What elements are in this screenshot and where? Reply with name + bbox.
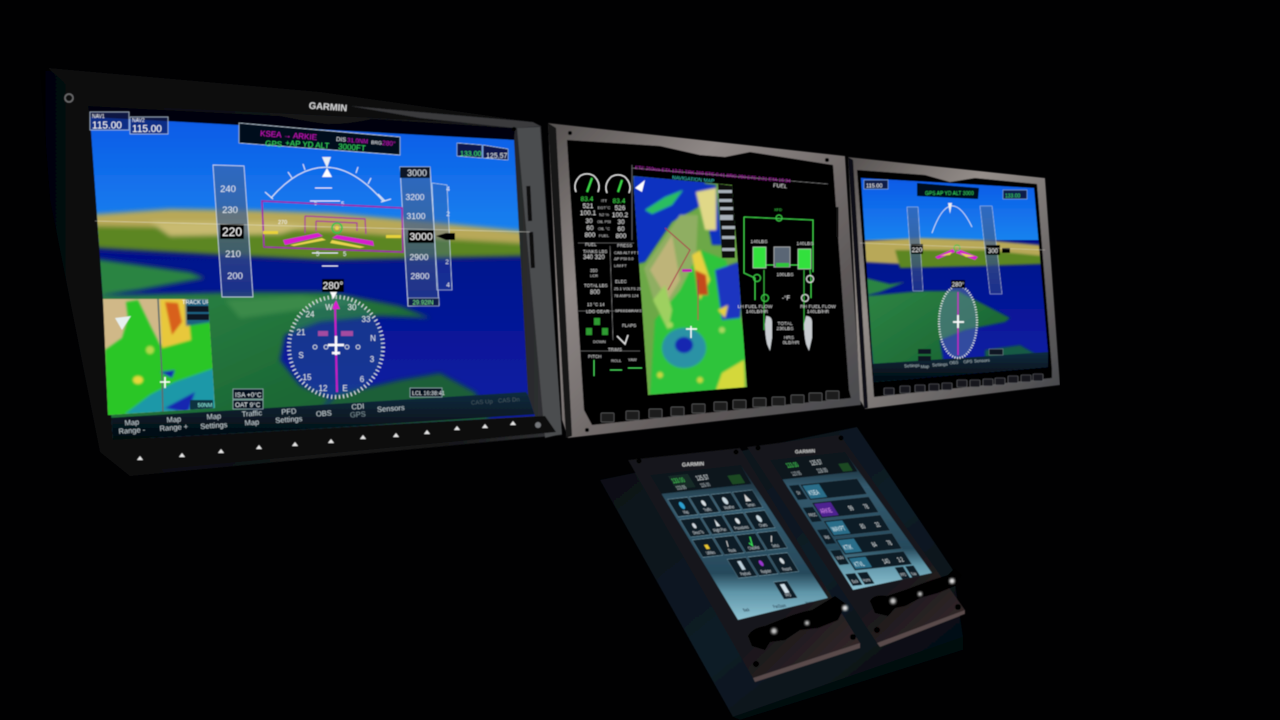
engine and systems data: FLAPS [622,323,636,328]
COM frequency boxes [457,143,508,160]
altitude tape and vertical speed [400,167,455,306]
flight plan and autopilot status box: KSEA → ARKIE [260,129,317,142]
panel: left touchscreen controller [628,448,860,682]
right HSI compass [939,280,977,358]
fuel system schematic: -°F [782,296,790,302]
left tablet screen: Payload [739,570,752,577]
softkey bar: CAS Up [471,399,494,407]
altitude tape and vertical speed: 2900 [410,252,429,262]
left tablet screen: Checklist [747,544,761,551]
compass HSI: E [342,384,348,393]
panel: right PFD display [628,157,1060,682]
right HSI compass: 280° [952,282,965,288]
fuel system schematic: XFD [774,207,782,212]
engine gauges: FUEL [599,233,610,238]
engine and systems data: 350 [590,268,598,273]
engine gauges: 30 [617,219,625,226]
fuel system schematic: 100LBS [776,272,794,278]
engine and systems data: 800 [590,290,601,296]
panel: center MFD display [548,123,861,438]
panel: right touchscreen controller [747,435,965,647]
softkey bar: Range + [159,422,189,433]
engine gauges: 800 [616,233,627,240]
speed tape [213,165,253,297]
right screen: synthetic vision: GPS [963,359,973,364]
right PFD instruments: GPS AP YD ALT 3000 [925,191,974,197]
engine gauges: 83.4 [613,198,626,205]
right tablet screen: 140 [882,559,892,566]
engine and systems data: ROLL [611,358,622,363]
map header strip [632,165,828,240]
speed tape: 220 [222,225,242,239]
flight deck artwork [40,68,1060,720]
temperature and clock readouts: OAT 9°C [235,401,261,409]
fuel system schematic: LH FUEL FLOW [738,304,773,310]
right tablet screen: 78 [886,540,894,547]
left tablet screen: Home [804,600,815,606]
softkey bar: PFD [281,406,297,417]
inset map [102,298,216,416]
flight plan and autopilot status box: GPS [265,139,282,149]
compass HSI: 6 [360,375,365,384]
flight plan and autopilot status box: BRG [371,140,382,147]
NAV frequency boxes: NAV1 [92,114,105,120]
speed tape: 210 [225,249,241,260]
engine and systems data: SPEEDBRAKE [615,308,642,313]
status row: 133.00 [785,462,801,470]
status row: 119.00 [816,468,830,475]
temperature and clock readouts: LCL 16:38:41 [412,391,445,397]
attitude indicator: 270 [278,220,287,226]
brand logo: GARMIN [308,101,348,114]
engine gauges: 521 [583,203,594,210]
panel: left PFD display [40,68,562,476]
engine gauges: 800 [585,232,596,239]
tablet brand logo: GARMIN [795,448,816,456]
softkey bar: Map [206,412,221,422]
engine gauges: 526 [615,205,626,212]
status row: 115.00 [699,482,712,489]
attitude indicator: 5 [316,252,320,258]
right tablet screen: Home [861,577,872,583]
softkey bar: Traffic [241,408,263,419]
fuel system schematic: 140LBS [796,241,814,247]
left tablet screen [650,465,828,620]
NAV frequency boxes: 115.00 [132,124,162,135]
altitude tape and vertical speed: 2800 [411,271,430,281]
engine and systems data: TOTAL LBS [584,283,608,288]
softkey bar: Settings [200,420,228,431]
engine and systems data: YAW [628,357,637,362]
engine gauges: 83.4 [581,196,594,203]
fuel system schematic: 140LB/HR [807,309,830,315]
map header strip: FUEL [773,183,787,190]
inset map: TRACK UP [182,300,210,306]
left tablet screen: Record [781,566,793,572]
right tablet screen: PFD [899,572,908,578]
compass HSI: 33 [362,315,371,324]
attitude indicator [95,157,530,266]
fuel system schematic [738,207,836,351]
softkey bar: OBS [316,408,332,419]
engine and systems data: 25.1 VOLTS 25 [614,286,642,291]
compass HSI: 15 [303,373,312,382]
attitude indicator: 5 [314,201,318,207]
right display bezel [848,157,1060,409]
left tablet screen: Setup [770,542,781,548]
engine cylinders [765,316,812,351]
softkey buttons row [137,421,516,460]
status row: 125.57 [694,474,712,483]
speed tape: 230 [222,205,238,216]
engine and systems data: 13 °C 14 [587,302,605,307]
flight plan and autopilot status box [239,123,400,155]
fuel system schematic: HRS [784,335,794,341]
compass HSI: N [370,334,376,343]
status row: 133.00 [670,476,687,485]
altitude tape and vertical speed: 2 [446,211,450,218]
engine gauges: EGT°C [598,205,610,210]
left tablet screen: PFD [784,592,792,598]
compass HSI: 30 [348,303,357,312]
right tablet screen: Dir [795,490,802,496]
left tablet screen: Register [759,568,773,574]
attitude indicator: 5 [343,252,347,258]
right tablet screen: PROC [807,512,818,518]
softkey bar [108,392,540,442]
compass HSI: 3 [370,355,375,364]
right tablet knobs [870,568,962,616]
softkey bar: Map [124,418,139,428]
engine and systems data: PRESS [617,243,632,248]
NAV frequency boxes [90,112,168,135]
left tablet screen: Flight Plan [712,526,728,533]
engine and systems data: 340 320 [583,255,605,261]
engine gauges: OIL °C [598,226,610,231]
temperature and clock readouts [233,388,445,409]
tablet brand logo: GARMIN [682,461,704,469]
map header strip: ETE 250nm ETA 13:31 TRK 280 ETE 0:41 BRG 280 ETE 2:31 ETA 15:34 [635,165,791,185]
softkey bar: CDI [351,402,365,411]
engine gauges [575,174,630,240]
engine and systems data: LDG GEAR [586,309,610,314]
flight plan and autopilot status box: DIS [336,137,346,144]
fuel system schematic: 0LB/HR [783,340,800,346]
status row [770,452,857,480]
right screen: synthetic vision: Map [921,364,930,369]
NAV frequency boxes: NAV2 [132,118,145,124]
engine gauges: 60 [617,226,625,233]
navigation map [632,175,748,396]
engine and systems data: TRIMS [608,347,622,352]
softkey bar: GPS [350,409,366,420]
right tablet screen: 78 [863,504,871,511]
flight plan and autopilot status box: 3000FT [338,142,366,153]
engine and systems data: PITCH [588,354,602,359]
right screen: synthetic vision: OBS [949,360,959,365]
right PFD instruments: 220 [912,247,923,254]
fuel system schematic: 140LB/HR [746,309,769,315]
right PFD instruments: 115.00 [866,184,882,190]
altitude tape and vertical speed: 2 [445,259,449,266]
engine gauges: N2 % [599,212,609,217]
right screen: synthetic vision [855,175,1055,390]
status row: 123.55 [790,470,803,478]
right tablet screen: 3.2 [897,557,906,564]
right tablet screen: KTIK [842,545,855,552]
COM frequency boxes: 125.57 [486,153,508,160]
left display bezel [40,68,562,476]
engine and systems data: ELEC [615,279,628,284]
altitude tape and vertical speed: 4 [446,186,450,193]
right tablet screen: 80 [859,524,868,531]
left tablet screen: Weather [722,504,736,510]
engine and systems data: CAB ALT FT 500 [614,250,645,255]
right tablet screen: Wpt [823,534,831,540]
compass HSI: 21 [297,328,306,337]
left tablet screen: Map [682,509,691,515]
app tiles [667,489,800,600]
speed tape: 200 [227,271,243,282]
altitude tape and vertical speed: 4 [446,282,450,289]
left tablet screen: Charts [757,522,769,528]
left tablet screen: Route [727,547,738,553]
softkey bar: Sensors [377,403,405,414]
engine and systems data: L/M FT [614,263,627,268]
temperature and clock readouts: ISA +0°C [235,391,262,399]
right softkey buttons [884,374,1043,395]
right PFD instruments [860,180,1045,395]
fuel tanks [753,247,811,269]
engine and systems data: FUEL [585,242,597,247]
softkey bar: CAS Dn [498,397,520,405]
flight plan rows [800,478,912,570]
left screen: synthetic vision [85,110,545,442]
right tablet screen: 99 [848,506,856,513]
fuel system schematic: 230LBS [776,326,794,332]
pedestal: console under tablets [600,427,963,720]
engine and systems data: LCR [590,273,598,278]
right tablet screen: 32 [874,522,883,529]
altitude tape and vertical speed: 3200 [406,192,425,202]
right screen: synthetic vision: Settings [932,361,948,368]
flight plan and autopilot status box: 280° [382,139,396,148]
engine gauges: 30 [585,218,593,225]
right tablet screen: VNAV [835,555,845,561]
left tablet screen: Back [742,607,751,613]
flight plan and autopilot status box: +AP YD ALT [285,139,330,151]
right tablet screen: 84 [871,542,879,549]
left tablet screen: Traffic [702,506,713,513]
left tablet screen: Procedures [733,524,750,531]
engine gauges: 60 [586,225,594,232]
engine gauges: OIL PSI [597,219,611,224]
engine and systems data [578,242,645,376]
engine and systems data: ΔP PSI 0.0 [614,256,634,261]
compass HSI: 280° [323,281,343,292]
engine gauges: 100.2 [612,212,629,219]
altitude tape and vertical speed: 29.92IN [412,300,434,306]
right tablet screen: KTVL [853,561,867,569]
right screen: synthetic vision: Settings [904,362,920,369]
compass HSI: W [325,303,333,312]
fuel system schematic: TOTAL [777,321,793,327]
fuel system schematic: 140LBS [750,239,768,245]
softkey bar: Range - [118,425,146,436]
COM frequency boxes: 133.00 [460,151,482,158]
right screen: synthetic vision: Sensors [974,357,990,364]
engine and systems data: DOWN [593,339,606,344]
status row: 125.57 [809,460,825,467]
right tablet screen: WAYPT [831,526,848,534]
right tablet screen: Nav [910,570,918,576]
right tablet screen: Back [850,578,860,584]
engine gauges: 100.1 [580,210,597,217]
altitude tape and vertical speed: 3100 [407,211,426,221]
center display bezel [548,123,861,438]
fuel system schematic: RH FUEL FLOW [800,304,836,310]
right tablet screen: KSEA [807,490,822,497]
left tablet knobs [748,596,848,650]
aircraft symbol [283,223,374,248]
center softkey buttons [601,391,839,422]
inset map: 50NM [198,403,213,409]
status row: 123.55 [675,484,688,492]
engine and systems data: 78 AMPS 124 [614,293,639,298]
compass HSI: S [298,351,304,360]
illustration: Garmin flight deck [46,68,1060,720]
left tablet screen: Utilities [705,549,716,556]
left tablet screen: Terrain [745,502,756,508]
softkey bar: Settings [275,414,303,425]
NAV frequency boxes: 115.00 [92,120,122,132]
softkey bar: Map [166,415,181,425]
compass HSI: 12 [319,384,328,393]
altitude tape and vertical speed: 3000 [409,231,433,243]
engine and systems data: TANKS LBS [583,249,607,254]
status row [650,465,751,494]
compass HSI: 24 [306,310,315,319]
compass HSI [289,279,383,397]
right PFD instruments: 133.00 [1005,194,1021,200]
left tablet screen: Direct To [691,529,706,535]
softkey bar: Map [244,418,259,428]
right tablet screen [770,452,932,590]
engine gauges: ITT [601,198,608,203]
right PFD instruments: 300 [988,249,999,255]
altitude tape and vertical speed: 3000 [407,168,427,178]
attitude indicator: 5 [341,202,345,208]
right tablet screen: ARKIE [819,508,834,516]
left tablet screen: Pan/Zoom [772,603,788,609]
flight plan and autopilot status box: 31.0NM [347,138,368,145]
map header strip: NAVIGATION MAP [672,175,715,185]
speed tape: 240 [220,184,236,195]
